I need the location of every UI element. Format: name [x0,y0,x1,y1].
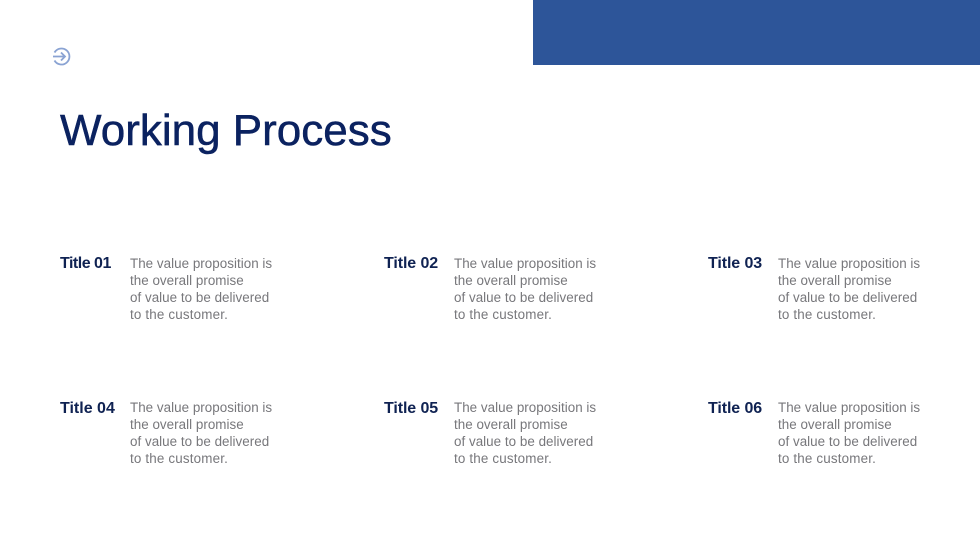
description: Title 06 [778,400,920,466]
description: Title 06: to the customer. [778,451,876,466]
icon: circled arrow [53,48,70,66]
description: Title 05: to the customer. [454,451,552,466]
heading: Title 04: Title 04 [60,400,115,417]
description: Title 02: The value proposition is [454,256,596,270]
description: Title 02: to the customer. [454,307,552,322]
item: Title 01 [60,255,272,322]
description: Title 02 [454,256,596,322]
description: Title 04: to the customer. [130,451,228,466]
description: Title 04: The value proposition is [130,400,272,414]
description: Title 04 [130,400,272,466]
description: Title 03: The value proposition is [778,256,920,270]
description: Title 05 [454,400,596,466]
description: Title 03: of value to be delivered [778,290,917,305]
heading: Title 02: Title 02 [384,255,438,272]
description: Title 06: of value to be delivered [778,434,917,449]
description: Title 06: The value proposition is [778,400,920,414]
blue corner banner [533,0,980,65]
heading: Title 03: Title 03 [708,255,762,272]
description: Title 05: of value to be delivered [454,434,593,449]
description: Title 05: the overall promise [454,417,568,432]
heading: Title 06: Title 06 [708,400,762,417]
description: Title 05: The value proposition is [454,400,596,414]
description: Title 03: the overall promise [778,273,892,288]
item: Title 02 [384,255,596,322]
title: Working Process [60,106,392,155]
description: Title 03: to the customer. [778,307,876,322]
heading: Title 01: Title 01 [60,255,111,272]
description: Title 02: the overall promise [454,273,568,288]
heading: Title 05: Title 05 [384,400,438,417]
description: Title 03 [778,256,920,322]
description: Title 02: of value to be delivered [454,290,593,305]
description: Title 01: to the customer. [130,307,228,322]
item: Title 04 [60,400,272,466]
description: Title 01: the overall promise [130,273,244,288]
description: Title 06: the overall promise [778,417,892,432]
description: Title 04: the overall promise [130,417,244,432]
item: Title 05 [384,400,596,466]
description: Title 01: The value proposition is [130,256,272,270]
description: Title 01: of value to be delivered [130,290,269,305]
item: Title 03 [708,255,920,322]
item: Title 06 [708,400,920,466]
description: Title 01 [130,256,272,322]
description: Title 04: of value to be delivered [130,434,269,449]
